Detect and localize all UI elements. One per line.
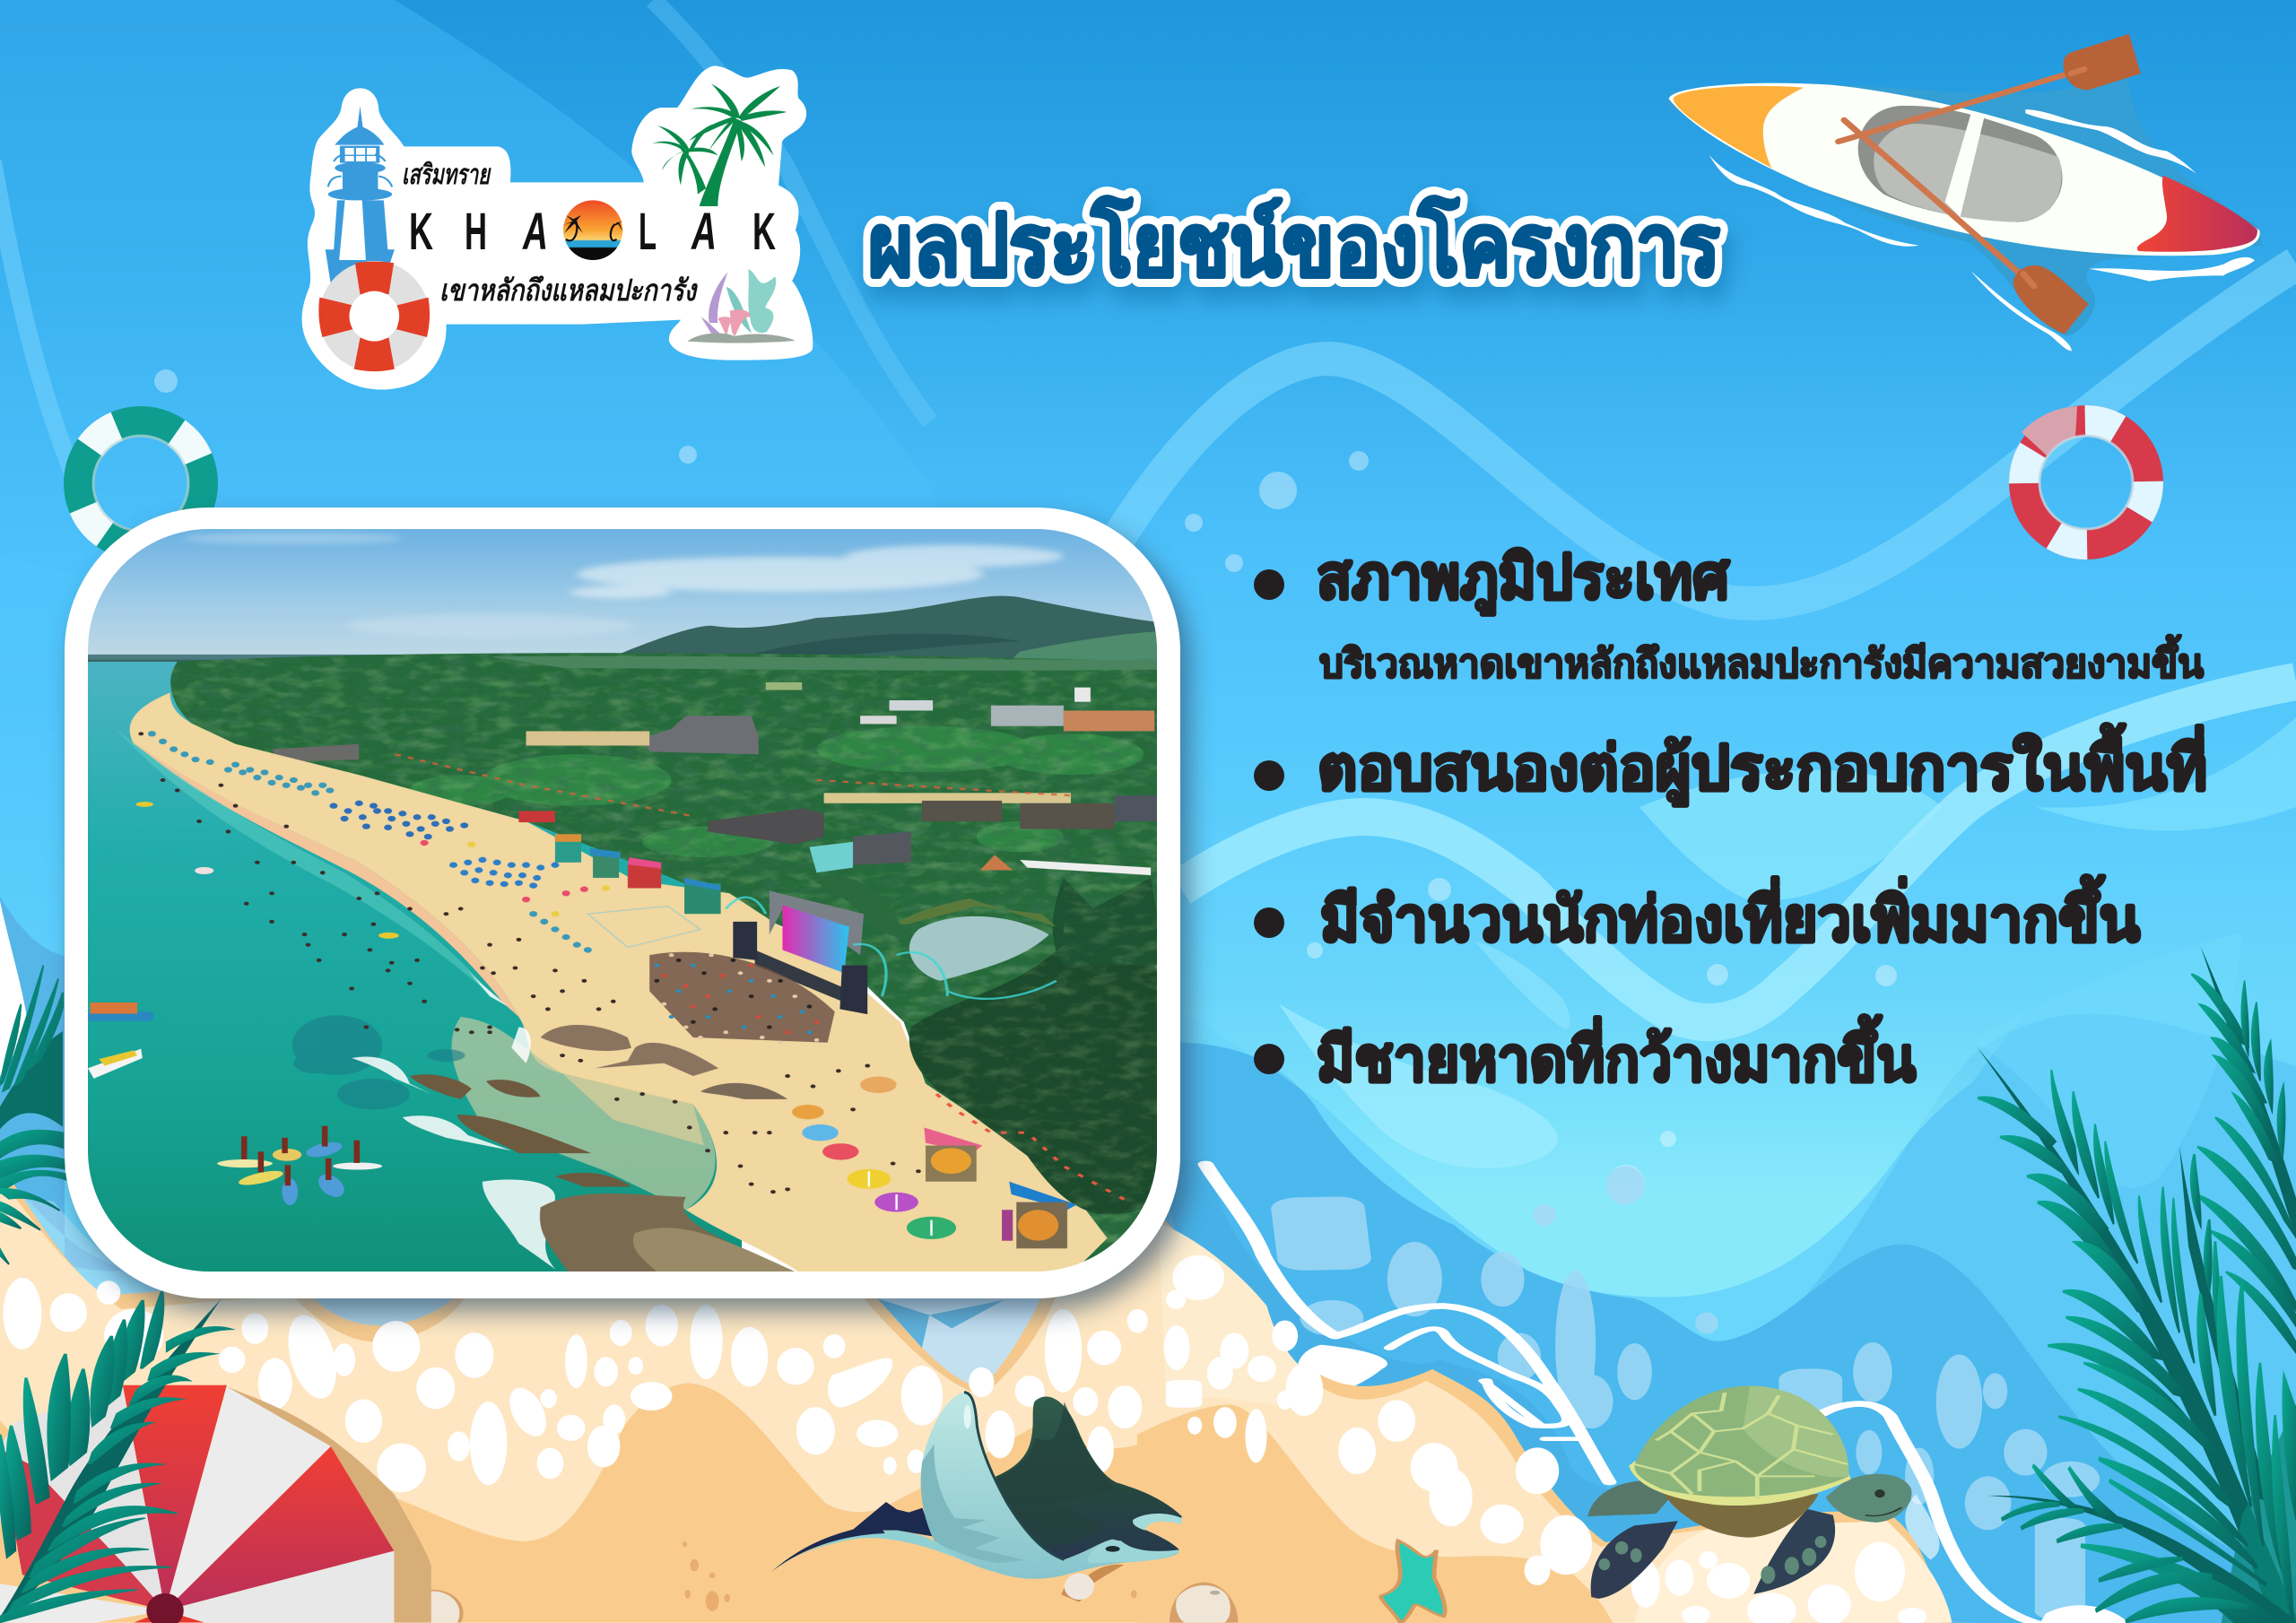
logo: Khao Lak sticker: เขาหลักถึงแหลมปะการัง [439,273,698,307]
logo: Khao Lak sticker: K [409,203,433,261]
logo: Khao Lak sticker [302,65,813,389]
icon: striped beach umbrella [0,1385,431,1623]
icon: manta ray [771,1393,1182,1602]
icon: sea turtle [1587,1385,1911,1599]
logo: Khao Lak sticker: เสริมทราย [402,159,491,190]
logo: Khao Lak sticker: H [465,203,487,261]
bullet point 4: มีชายหาดที่กว้างมากขึ้น [1317,1014,1916,1094]
logo: Khao Lak sticker: A [691,203,717,261]
palm: bottom right fronds [1976,946,2296,1623]
bullet point 1: สภาพภูมิประเทศ [1317,543,1730,616]
text block: benefits list [1254,543,2207,1094]
icon: starfish [1381,1541,1445,1622]
panel: photo of Khao Lak beach [65,508,1189,1311]
palm: middle left frond [0,966,69,1264]
palm: bottom left frond [0,1291,232,1622]
bullet point 2: ตอบสนองต่อผู้ประกอบการในพื้นที่ [1318,723,2207,807]
title: ผลประโยชน์ของโครงการ [868,196,1720,294]
icon: teal life ring behind photo [55,397,227,569]
logo: Khao Lak sticker: L [639,203,657,261]
icon: pearl shells on the sand [397,1583,1238,1622]
bullet point 3: มีจำนวนนักท่องเที่ยวเพิ่มมากขึ้น [1320,874,2140,954]
sand: beach and foam [0,1157,2132,1623]
air bubbles [154,369,1897,1226]
logo: Khao Lak sticker: A [522,203,548,261]
icon: kayak with paddles [1666,34,2263,352]
sub text under bullet 1: บริเวณหาดเขาหลักถึงแหลมปะการังมีความสวยงามขึ้น [1319,634,2204,686]
title: ผลประโยชน์ของโครงการ [868,196,1720,294]
logo: Khao Lak sticker: K [752,203,776,261]
icon: red life ring [2022,406,2149,545]
